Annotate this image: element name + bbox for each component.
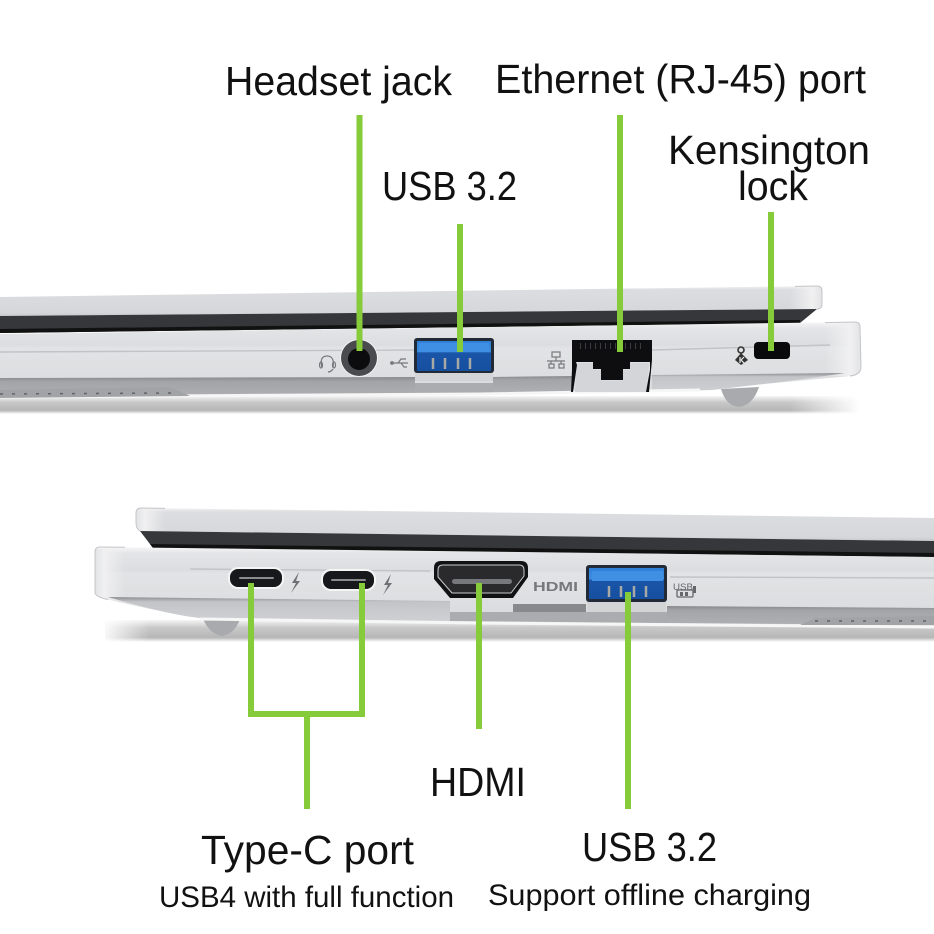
shadow xyxy=(105,620,934,642)
line: Ethernet xyxy=(617,115,623,352)
line: USB 3.2 top xyxy=(457,224,463,352)
headset jack xyxy=(340,339,378,377)
line: headset jack xyxy=(356,115,362,351)
speaker grille xyxy=(0,387,190,398)
icon: network xyxy=(547,352,565,368)
label: USB 3.2 bottom: USB 3.2 xyxy=(582,824,717,870)
icon: Kensington xyxy=(735,347,748,365)
base xyxy=(95,547,934,625)
foot xyxy=(201,612,242,636)
leader lines xyxy=(251,115,771,809)
Type-C port 1 xyxy=(228,567,284,589)
label: Type-C port xyxy=(159,827,454,914)
line: USB 3.2 bottom xyxy=(625,592,631,809)
lid xyxy=(0,286,822,316)
laptop: top view with headset, USB, Ethernet and lock ports xyxy=(0,286,861,414)
line: HDMI xyxy=(476,583,482,729)
label: Kensington lock: Kensington xyxy=(668,127,870,173)
label: USB 3.2 top: USB 3.2 xyxy=(382,163,517,209)
lid xyxy=(136,508,934,541)
Kensington lock slot xyxy=(754,342,790,359)
speaker grille xyxy=(800,616,934,625)
HDMI logo: HDMI xyxy=(533,579,578,594)
label: headset jack: Headset jack xyxy=(225,58,452,104)
USB 3.2 port xyxy=(586,565,667,612)
HDMI port xyxy=(434,561,528,598)
line: Type-C bracket xyxy=(251,583,362,809)
icon: bolt 2 xyxy=(383,574,392,595)
label: Type-C port: USB4 with full function xyxy=(159,881,454,914)
foot xyxy=(721,387,759,407)
hinge gap xyxy=(0,309,817,333)
label: USB 3.2 bottom xyxy=(488,824,811,912)
laptop: bottom view with Type-C, HDMI and USB ports xyxy=(95,508,934,642)
base xyxy=(0,322,861,398)
Type-C port 2 xyxy=(321,569,376,591)
line: Kensington xyxy=(768,212,774,351)
icon: USB symbol xyxy=(391,359,408,367)
icon: headset xyxy=(320,356,336,372)
USB 3.2 port xyxy=(414,338,494,381)
label: HDMI: HDMI xyxy=(430,759,526,805)
label: Kensington lock xyxy=(668,127,870,209)
shadow xyxy=(0,396,860,414)
label: Ethernet: Ethernet (RJ-45) port xyxy=(495,56,867,102)
Ethernet port xyxy=(571,340,652,392)
hinge gap xyxy=(140,531,934,557)
label: Type-C port: Type-C port xyxy=(201,827,415,873)
icon: USB charging: USB xyxy=(673,582,693,592)
icon: bolt 1 xyxy=(291,572,300,593)
icon: USB charging xyxy=(673,582,696,597)
label: Kensington lock: lock xyxy=(738,163,808,209)
label: USB 3.2 bottom: Support offline charging xyxy=(488,879,811,912)
